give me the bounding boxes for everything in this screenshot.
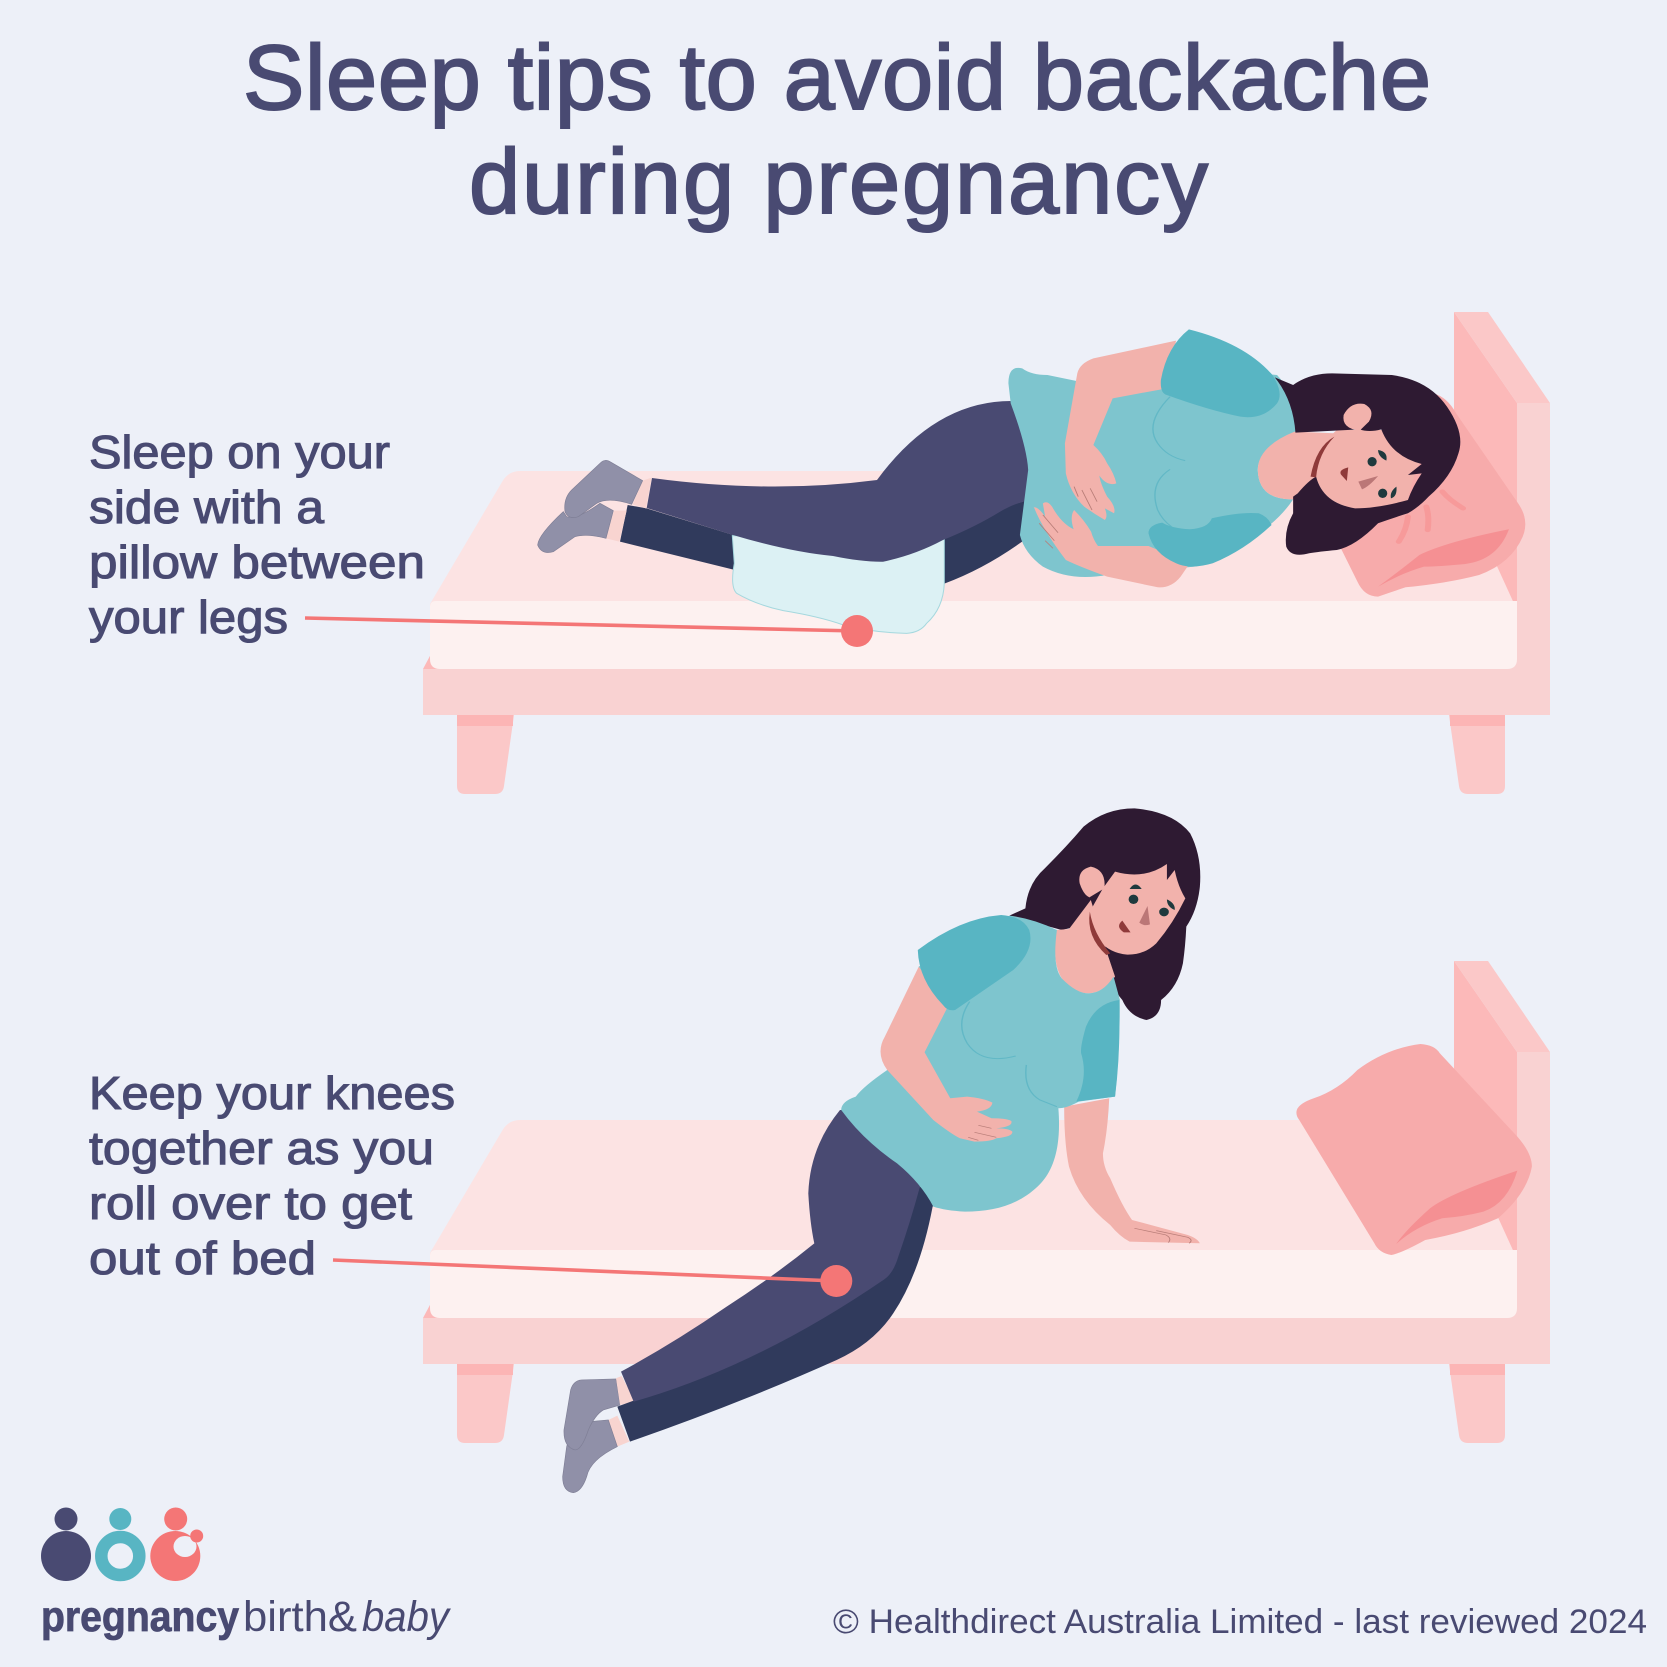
nose	[1358, 476, 1378, 489]
bed: bottom	[423, 961, 1550, 1443]
face	[1316, 430, 1419, 508]
logo icon: coral figure	[150, 1508, 203, 1581]
back leg	[538, 497, 1040, 587]
logo wordmark: birth&	[243, 1593, 357, 1641]
text: sleep on your side: pillow between	[89, 536, 425, 588]
copyright: © Healthdirect Australia Limited - last reviewed 2024	[833, 1603, 1647, 1641]
callout: knees together	[333, 1260, 852, 1297]
title: Sleep tips to avoid backache	[243, 27, 1431, 129]
bed: top	[423, 312, 1550, 794]
logo wordmark: pregnancy	[41, 1593, 239, 1641]
jaw shadow	[1089, 912, 1110, 955]
bust lines	[962, 1002, 1057, 1107]
figure: woman lying on her side	[538, 329, 1525, 633]
upper body	[841, 808, 1200, 1243]
neck	[1258, 432, 1337, 499]
text: sleep on your side	[89, 426, 425, 643]
hair	[1275, 373, 1460, 555]
upper body	[1008, 329, 1460, 587]
text: sleep on your side: Sleep on your	[89, 426, 390, 478]
sleeve	[918, 915, 1030, 1010]
front arm and hand	[881, 967, 1012, 1142]
logo wordmark: baby	[362, 1593, 451, 1641]
mouth	[1340, 467, 1348, 481]
legs and socks	[563, 1110, 943, 1493]
face	[1090, 864, 1185, 955]
logo wordmark	[41, 1593, 451, 1641]
back arm	[1064, 1098, 1200, 1243]
head pillow	[1337, 393, 1525, 597]
callout: pillow between legs	[305, 615, 873, 647]
nose	[1139, 906, 1150, 925]
text: sleep on your side: side with a	[89, 481, 324, 533]
lower arm and hand	[1034, 502, 1190, 587]
right sleeve	[1076, 1000, 1119, 1102]
jaw shadow	[1311, 437, 1334, 477]
eyes	[1368, 450, 1397, 498]
bust lines	[1153, 397, 1185, 527]
neck	[1055, 900, 1115, 993]
title: during pregnancy	[469, 131, 1208, 233]
shirt	[841, 916, 1120, 1212]
logo icon: teal figure	[101, 1508, 139, 1575]
text: keep your knees together: Keep your knees	[89, 1067, 455, 1119]
ear	[1079, 867, 1105, 897]
title	[243, 27, 1431, 233]
front sock	[565, 460, 652, 518]
front leg	[647, 401, 1040, 562]
mouth	[1119, 921, 1131, 932]
text: keep your knees together: out of bed	[89, 1232, 316, 1284]
pillow on bottom bed	[1296, 1044, 1532, 1255]
eyes	[1129, 884, 1175, 916]
shirt	[1008, 367, 1302, 577]
hair	[1009, 808, 1200, 1020]
figure: woman getting out of bed	[563, 808, 1200, 1493]
text: sleep on your side: your legs	[89, 591, 288, 643]
text: keep your knees together: together as you	[89, 1122, 434, 1174]
text: keep your knees together	[89, 1067, 455, 1284]
upper arm and hand	[1065, 341, 1176, 520]
bottom sleeve	[1148, 513, 1272, 567]
text: keep your knees together: roll over to get	[89, 1177, 412, 1229]
ear	[1343, 404, 1371, 431]
logo icon: navy figure	[41, 1508, 91, 1581]
logo: pregnancy birth and baby	[41, 1508, 451, 1641]
top sleeve	[1161, 329, 1280, 417]
pillow between legs	[732, 536, 944, 633]
